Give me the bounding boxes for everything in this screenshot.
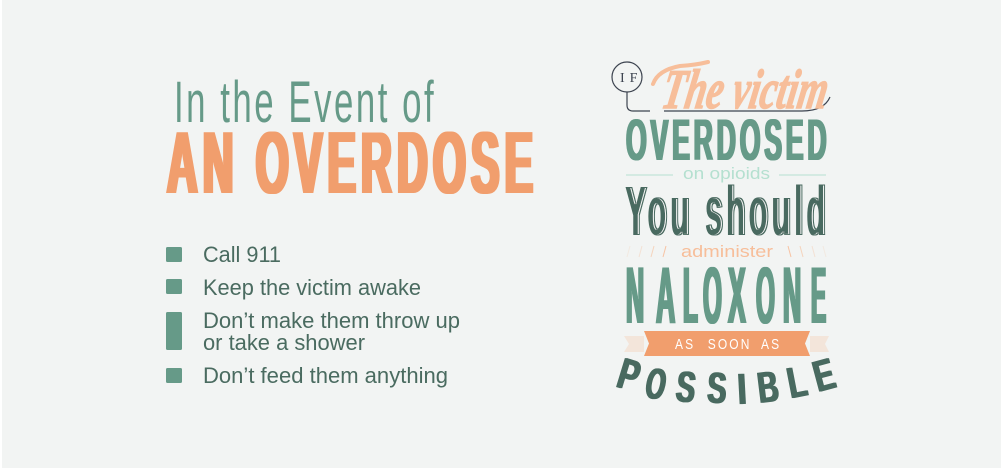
heading: naloxone: E xyxy=(811,249,826,341)
bullet: no food: Don’t feed them anything xyxy=(203,363,448,388)
heading: you should: You should xyxy=(626,172,830,250)
ribbon: as soon as: SOON xyxy=(708,336,751,352)
icon: IF circle with connector line: IF xyxy=(620,71,642,86)
title xyxy=(167,71,538,212)
heading: naloxone: L xyxy=(683,250,698,341)
arched word: possible: P xyxy=(612,348,646,401)
heading: naloxone: X xyxy=(728,249,746,340)
label: administer with slashes: administer xyxy=(681,242,773,261)
bullet: call 911 xyxy=(166,242,281,267)
icon: IF circle with connector line xyxy=(612,62,830,111)
bullet: no vomiting or shower: or take a shower xyxy=(203,330,365,355)
script: the victim xyxy=(653,59,834,121)
ribbon: as soon as: AS xyxy=(675,336,695,352)
ribbon: as soon as: AS xyxy=(761,336,781,352)
arched word: possible: L xyxy=(783,356,811,408)
arched word: possible: S xyxy=(674,362,698,412)
script: the victim: The victim xyxy=(658,59,834,121)
heading: naloxone: O xyxy=(703,250,722,341)
ribbon: as soon as xyxy=(624,331,829,356)
arched word: possible: I xyxy=(737,364,747,414)
heading: naloxone: O xyxy=(756,250,775,341)
heading: overdosed: OVERDOSED xyxy=(626,107,830,173)
heading: naloxone: A xyxy=(656,249,675,340)
arched word: possible xyxy=(612,348,840,414)
arched word: possible: O xyxy=(641,358,670,410)
arched word: possible: E xyxy=(808,349,840,401)
title line two: AN OVERDOSE xyxy=(167,114,538,212)
bullet: no vomiting or shower xyxy=(166,308,460,355)
typographic lockup xyxy=(612,59,840,414)
title line one: In the Event of xyxy=(174,71,436,135)
heading: naloxone xyxy=(626,249,826,341)
label: administer with slashes xyxy=(627,242,826,261)
bullet: call 911: Call 911 xyxy=(203,242,281,267)
bullet: keep awake: Keep the victim awake xyxy=(203,275,421,300)
heading: naloxone: N xyxy=(626,250,644,341)
label: on opioids with rules: on opioids xyxy=(683,164,770,183)
checklist xyxy=(166,242,460,388)
bullet: no vomiting or shower: Don’t make them throw up xyxy=(203,308,460,333)
arched word: possible: B xyxy=(755,362,781,413)
heading: naloxone: N xyxy=(783,250,801,341)
arched word: possible: S xyxy=(706,363,728,413)
